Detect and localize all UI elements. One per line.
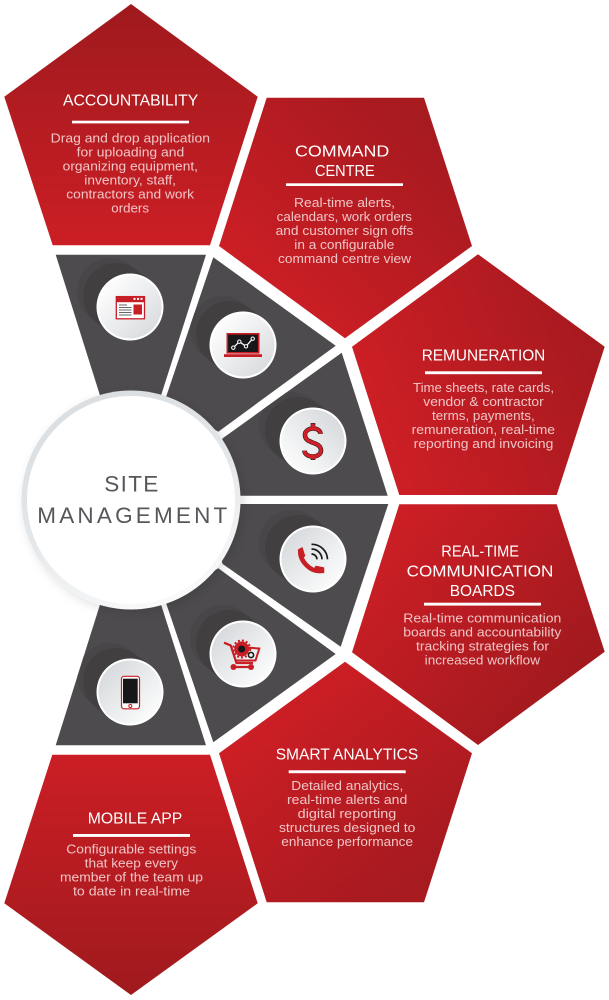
heading: remuneration: REMUNERATION xyxy=(422,347,545,364)
panel: accountability xyxy=(4,4,258,245)
text: accountability description: orders xyxy=(111,200,149,215)
text: smart analytics description: enhance performance xyxy=(281,834,413,849)
segment: browser window xyxy=(56,255,206,405)
pentagon: accountability xyxy=(4,4,258,245)
text: mobile app description: Configurable settings xyxy=(66,841,197,856)
text: mobile app description: that keep every xyxy=(85,855,179,870)
text: command centre description xyxy=(276,195,414,266)
pentagon: command centre xyxy=(219,98,472,338)
text: smart analytics description: Detailed analytics, xyxy=(291,778,403,793)
heading: command centre: COMMAND xyxy=(295,143,389,160)
title: site management: MANAGEMENT xyxy=(37,503,228,528)
panel: real-time communication boards xyxy=(352,504,605,745)
text: command centre description: Real-time alerts, xyxy=(294,195,395,210)
heading: real-time communication boards: BOARDS xyxy=(450,583,515,600)
text: accountability description: Drag and drop application xyxy=(51,130,210,145)
text: accountability description xyxy=(51,130,210,215)
segment: laptop chart xyxy=(165,257,336,432)
icon: smartphone xyxy=(122,676,140,709)
pentagon: mobile app xyxy=(4,755,258,995)
text: accountability description: contractors and work xyxy=(66,186,195,201)
pentagon: smart analytics xyxy=(219,662,472,902)
text: accountability description: inventory, staff, xyxy=(84,172,176,187)
text: smart analytics description: structures designed to xyxy=(279,820,415,835)
text: remuneration description: terms, payments, xyxy=(432,408,535,423)
panel: mobile app xyxy=(4,755,258,995)
text: command centre description: calendars, work orders xyxy=(277,209,413,224)
text: remuneration description: Time sheets, rate cards, xyxy=(413,380,554,395)
text: command centre description: and customer sign offs xyxy=(276,223,414,238)
central circle: site management xyxy=(22,390,240,610)
panel: remuneration xyxy=(352,254,605,495)
text: communication boards description: Real-time communication xyxy=(403,611,561,626)
heading: real-time communication boards: REAL-TIME xyxy=(441,544,519,561)
text: communication boards description xyxy=(403,611,562,668)
heading: accountability: ACCOUNTABILITY xyxy=(63,93,199,110)
icon: laptop with line chart xyxy=(224,334,262,357)
heading: command centre: CENTRE xyxy=(315,163,375,180)
text: communication boards description: increased workflow xyxy=(425,653,541,668)
text: mobile app description xyxy=(60,841,203,898)
title: site management: SITE xyxy=(104,472,158,497)
text: communication boards description: tracking strategies for xyxy=(416,639,550,654)
panel: smart analytics xyxy=(219,662,472,902)
title: site management xyxy=(37,472,228,528)
text: remuneration description: vendor & contractor xyxy=(423,394,544,409)
text: mobile app description: to date in real-time xyxy=(73,883,190,898)
segment: phone call xyxy=(222,504,388,647)
panel: command centre xyxy=(219,98,472,338)
text: command centre description: command centre view xyxy=(278,251,412,266)
pentagon: remuneration xyxy=(352,254,605,495)
text: mobile app description: member of the team up xyxy=(60,869,203,884)
segment: dollar xyxy=(222,352,388,496)
heading: real-time communication boards xyxy=(407,544,553,600)
text: remuneration description xyxy=(412,380,555,451)
pentagon: real-time communication boards xyxy=(352,504,605,745)
text: remuneration description: remuneration, real-time xyxy=(412,422,555,437)
heading: command centre xyxy=(295,143,389,180)
segment: cart xyxy=(165,568,336,742)
heading: mobile app: MOBILE APP xyxy=(88,810,182,827)
text: command centre description: in a configurable xyxy=(294,237,394,252)
text: accountability description: for uploading and xyxy=(77,144,184,159)
text: smart analytics description: digital reporting xyxy=(298,806,396,821)
text: smart analytics description xyxy=(279,778,415,849)
icon: phone with signal xyxy=(298,544,328,572)
heading: real-time communication boards: COMMUNICATION xyxy=(407,563,553,580)
icon: browser window xyxy=(116,296,145,319)
icon: dollar sign xyxy=(304,423,321,460)
heading: smart analytics: SMART ANALYTICS xyxy=(276,746,418,763)
text: accountability description: organizing equipment, xyxy=(63,158,198,173)
segment: mobile phone xyxy=(56,595,206,745)
icon: shopping cart with gears xyxy=(224,640,259,670)
text: smart analytics description: real-time alerts and xyxy=(287,792,407,807)
text: communication boards description: boards and accountability xyxy=(403,625,562,640)
text: remuneration description: reporting and invoicing xyxy=(414,436,553,451)
